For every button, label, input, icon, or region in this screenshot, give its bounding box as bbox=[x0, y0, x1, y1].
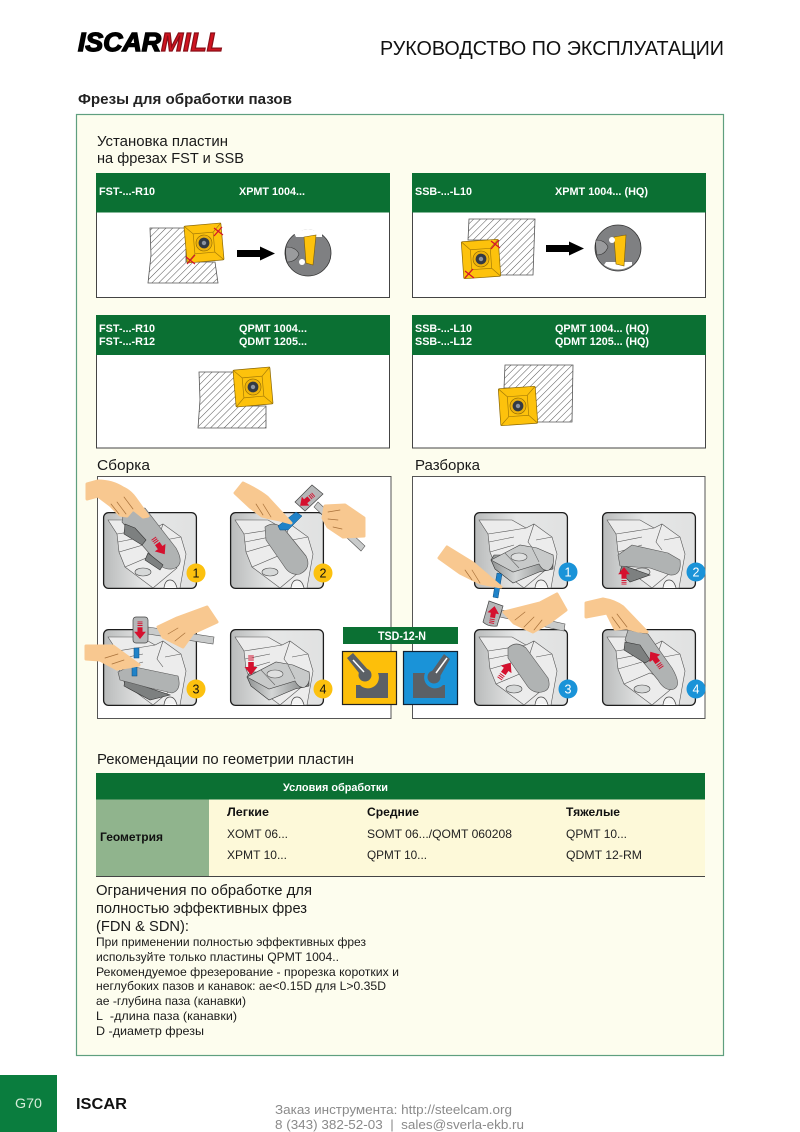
footer contact: 8 (343) 382-52-03 | sales@sverla-ekb.ru bbox=[275, 1117, 524, 1132]
table: machining conditions: QPMT 10... bbox=[367, 848, 427, 862]
step 1: 1 bbox=[565, 566, 572, 580]
table: machining conditions: XPMT 10... bbox=[227, 848, 287, 862]
step 1 bbox=[475, 513, 578, 588]
table: machining conditions: SOMT 06.../QOMT 060208 bbox=[367, 827, 512, 841]
detail circle bbox=[285, 230, 331, 276]
footer contact: Заказ инструмента: http://steelcam.org bbox=[275, 1102, 512, 1117]
limitations text: L -длина паза (канавки) bbox=[96, 1009, 237, 1023]
limitations text: ae -глубина паза (канавки) bbox=[96, 994, 246, 1008]
detail circle bbox=[595, 225, 641, 271]
limitations text: D -диаметр фрезы bbox=[96, 1024, 204, 1038]
limitations text: При применении полностью эффективных фрез bbox=[96, 935, 366, 949]
heading: insert mounting bbox=[97, 133, 244, 167]
step 2 bbox=[231, 483, 365, 588]
footer brand: ISCAR bbox=[76, 1096, 127, 1113]
step 2: 2 bbox=[320, 566, 327, 580]
page tab: G70: G70 bbox=[15, 1095, 42, 1111]
step 4 bbox=[586, 599, 706, 705]
icon: tighten wrench bbox=[342, 652, 396, 704]
logo: ISCARMILL bbox=[78, 27, 223, 57]
panel: assembly steps bbox=[86, 476, 391, 718]
hammer and hand bbox=[439, 547, 566, 632]
arrow bbox=[546, 242, 584, 256]
step 2 bbox=[603, 513, 706, 588]
table: machining conditions: Тяжелые bbox=[566, 805, 620, 819]
panel: SSB QPMT: QDMT 1205... (HQ) bbox=[555, 336, 649, 348]
table: machining conditions: Условия обработки bbox=[283, 782, 388, 794]
diagram: hatched seat with yellow insert bbox=[461, 219, 535, 279]
heading: limitations bbox=[96, 882, 312, 935]
diagram: hatched seat with yellow insert bbox=[148, 223, 224, 283]
page tab: G70 bbox=[0, 1075, 57, 1132]
table: machining conditions: XOMT 06... bbox=[227, 827, 288, 841]
heading: disassembly: Разборка bbox=[415, 457, 481, 474]
step 3 bbox=[86, 607, 217, 705]
logo: ISCARMILL: MILL bbox=[161, 27, 223, 57]
panel: SSB XPMT bbox=[412, 173, 706, 298]
logo: ISCARMILL: ISCAR bbox=[78, 27, 161, 57]
heading: assembly: Сборка bbox=[97, 457, 151, 474]
table: machining conditions: Геометрия bbox=[100, 830, 163, 844]
step 4: 4 bbox=[320, 682, 327, 696]
heading: insert mounting: на фрезах FST и SSB bbox=[97, 150, 244, 167]
heading: limitations: (FDN & SDN): bbox=[96, 918, 189, 935]
panel: SSB QPMT: QPMT 1004... (HQ) bbox=[555, 323, 649, 335]
panel: FST QPMT bbox=[96, 315, 390, 448]
panel: FST QPMT: FST-...-R12 bbox=[99, 336, 155, 348]
table: machining conditions: QDMT 12-RM bbox=[566, 848, 642, 862]
heading: limitations: полностью эффективных фрез bbox=[96, 900, 307, 917]
panel: FST XPMT: XPMT 1004... bbox=[239, 186, 305, 198]
table: machining conditions: Легкие bbox=[227, 805, 269, 819]
step 3: 3 bbox=[193, 682, 200, 696]
main panel background bbox=[76, 114, 724, 1056]
panel: disassembly steps bbox=[412, 476, 706, 718]
panel: FST XPMT: FST-...-R10 bbox=[99, 186, 155, 198]
panel: FST QPMT: FST-...-R10 bbox=[99, 323, 155, 335]
arrow bbox=[237, 246, 275, 260]
title: РУКОВОДСТВО ПО ЭКСПЛУАТАЦИИ bbox=[380, 37, 724, 60]
table: machining conditions: QPMT 10... bbox=[566, 827, 627, 841]
tool label: TSD-12-N bbox=[343, 627, 458, 644]
table: machining conditions bbox=[96, 773, 705, 876]
panel: FST XPMT bbox=[96, 173, 390, 298]
heading: limitations: Ограничения по обработке для bbox=[96, 882, 312, 899]
step 2: 2 bbox=[693, 566, 700, 580]
limitations text: используйте только пластины QPMT 1004.. bbox=[96, 950, 339, 964]
step 3 bbox=[475, 630, 578, 705]
limitations text: неглубоких пазов и канавок: ae<0.15D для L>0.35D bbox=[96, 979, 386, 993]
panel: SSB QPMT bbox=[412, 315, 706, 448]
diagram: insert in seat bbox=[498, 365, 573, 426]
panel: SSB XPMT: SSB-...-L10 bbox=[415, 186, 472, 198]
panel: SSB XPMT: XPMT 1004... (HQ) bbox=[555, 186, 648, 198]
panel: SSB QPMT: SSB-...-L10 bbox=[415, 323, 472, 335]
diagram: insert in seat bbox=[198, 367, 273, 428]
panel: FST QPMT: QPMT 1004... bbox=[239, 323, 307, 335]
heading: geometry recommendations: Рекомендации по геометрии пластин bbox=[97, 751, 354, 768]
table: machining conditions: Средние bbox=[367, 805, 419, 819]
step 1 bbox=[87, 481, 206, 588]
panel: SSB QPMT: SSB-...-L12 bbox=[415, 336, 472, 348]
icon: loosen wrench bbox=[404, 652, 458, 704]
panel: FST QPMT: QDMT 1205... bbox=[239, 336, 307, 348]
step 1: 1 bbox=[193, 566, 200, 580]
limitations text: Рекомендуемое фрезерование - прорезка коротких и bbox=[96, 965, 399, 979]
limitations text bbox=[96, 935, 399, 1038]
heading: insert mounting: Установка пластин bbox=[97, 133, 228, 150]
step 3: 3 bbox=[565, 682, 572, 696]
footer contact bbox=[275, 1102, 524, 1132]
section heading: Фрезы для обработки пазов bbox=[78, 92, 292, 108]
tool label: TSD-12-N: TSD-12-N bbox=[378, 631, 426, 643]
step 4 bbox=[231, 630, 332, 705]
step 4: 4 bbox=[693, 682, 700, 696]
